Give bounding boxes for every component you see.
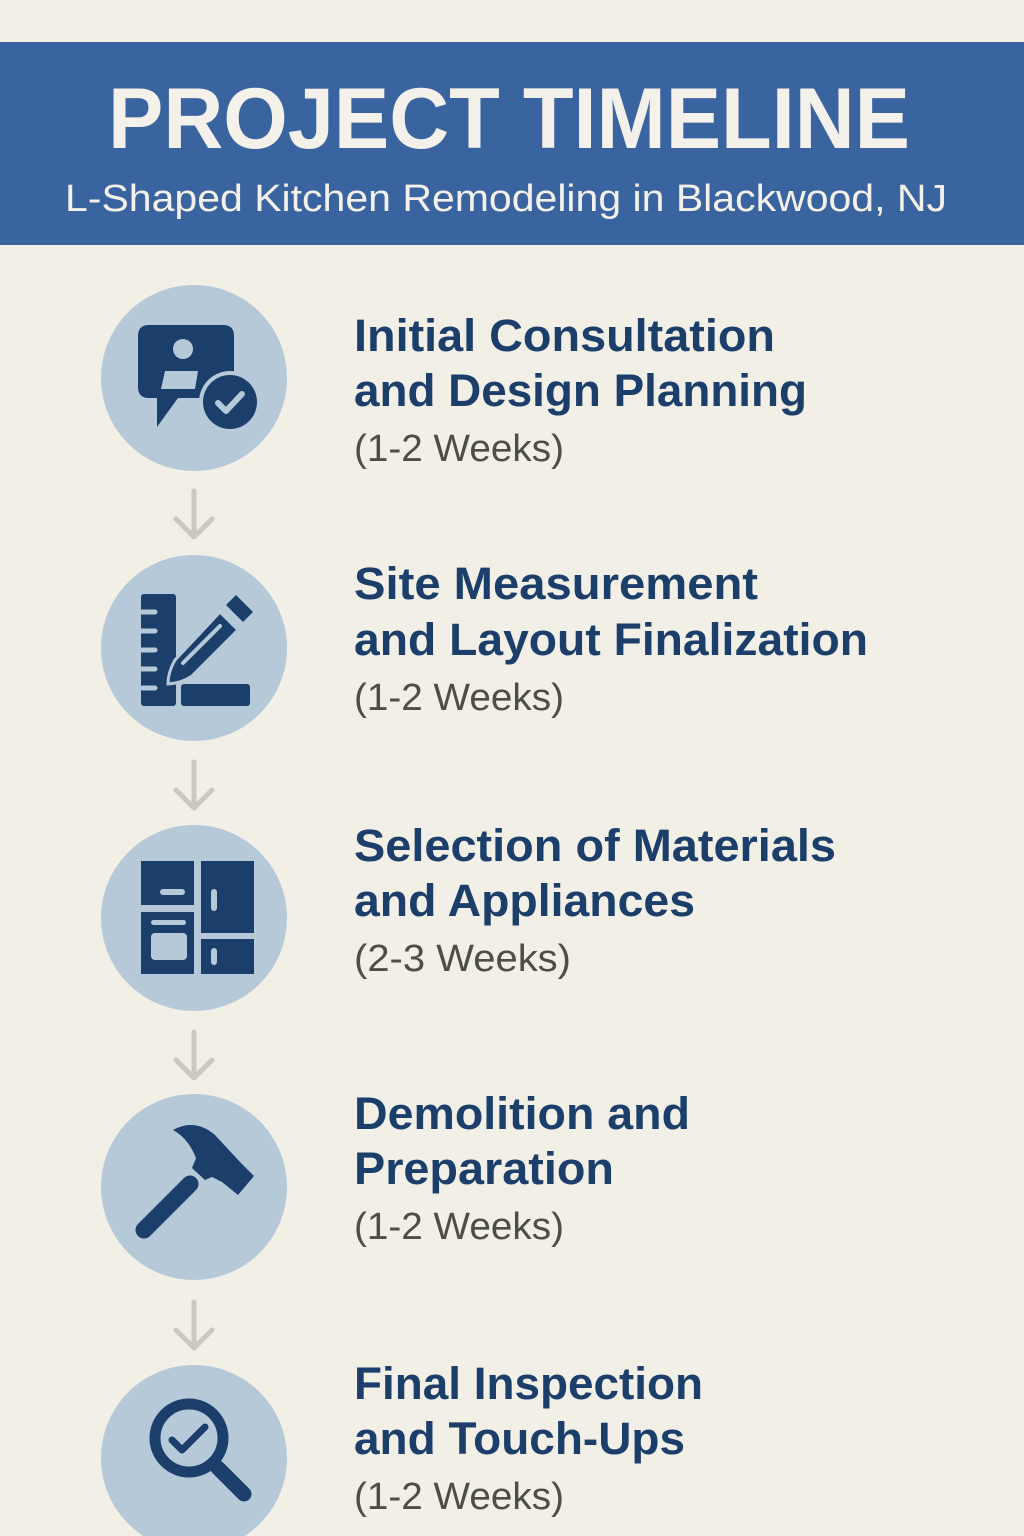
step 5 bbox=[101, 1358, 703, 1536]
icon: cabinets bbox=[101, 825, 287, 1011]
title: PROJECT TIMELINE bbox=[108, 71, 910, 167]
step 2 text bbox=[354, 558, 868, 719]
arrow 2 bbox=[176, 762, 212, 808]
step 5 text: and Touch-Ups bbox=[354, 1413, 685, 1464]
icon: consultation bbox=[101, 285, 287, 471]
step 4 text: Preparation bbox=[354, 1143, 614, 1194]
icon: hammer bbox=[101, 1094, 287, 1280]
step 4 text: (1-2 Weeks) bbox=[354, 1206, 564, 1248]
arrow 4 bbox=[176, 1302, 212, 1348]
icon: magnifier bbox=[101, 1365, 287, 1536]
step 3 text bbox=[354, 820, 836, 980]
step 4 bbox=[101, 1088, 690, 1280]
header banner bbox=[0, 42, 1024, 245]
step 1 text: and Design Planning bbox=[354, 365, 807, 416]
arrow 3 bbox=[176, 1032, 212, 1078]
step 1 text bbox=[354, 310, 807, 470]
step 2 text: and Layout Finalization bbox=[354, 614, 868, 665]
step 3 bbox=[101, 820, 836, 1011]
step 3 text: Selection of Materials bbox=[354, 820, 836, 871]
step 3 text: and Appliances bbox=[354, 875, 695, 926]
arrow 1 bbox=[176, 491, 212, 537]
step 3 text: (2-3 Weeks) bbox=[354, 938, 571, 980]
step 2 text: Site Measurement bbox=[354, 558, 758, 609]
step 5 text: (1-2 Weeks) bbox=[354, 1476, 564, 1518]
step 1 text: (1-2 Weeks) bbox=[354, 428, 564, 470]
step 5 text: Final Inspection bbox=[354, 1358, 703, 1409]
step 1 bbox=[101, 285, 807, 471]
step 1 text: Initial Consultation bbox=[354, 310, 775, 361]
step 5 text bbox=[354, 1358, 703, 1518]
step 2 bbox=[101, 555, 868, 741]
step 4 text bbox=[354, 1088, 690, 1248]
icon: ruler and pencil bbox=[101, 555, 287, 741]
subtitle: L-Shaped Kitchen Remodeling in Blackwood, NJ bbox=[65, 178, 947, 220]
step 4 text: Demolition and bbox=[354, 1088, 690, 1139]
step 2 text: (1-2 Weeks) bbox=[354, 677, 564, 719]
